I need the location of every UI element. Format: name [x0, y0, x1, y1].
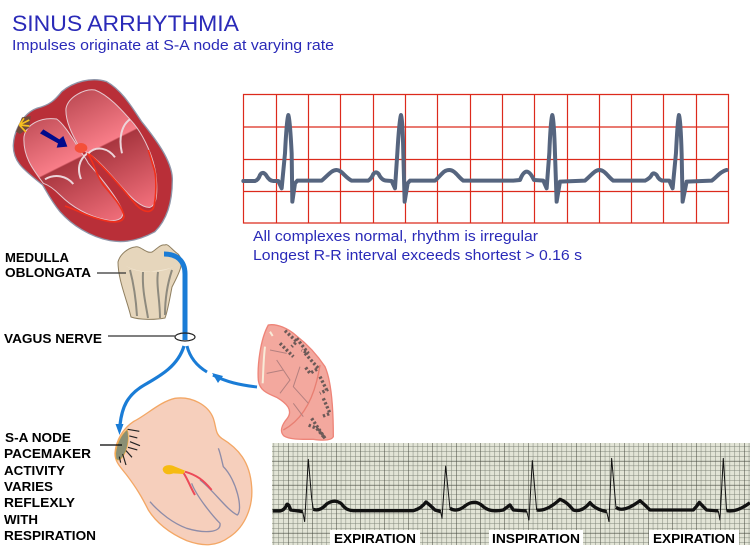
A-V node	[75, 143, 87, 153]
red bundle	[183, 472, 212, 495]
label: inspiration: INSPIRATION	[492, 531, 580, 546]
valves	[45, 119, 130, 184]
label: S-A node pacemaker: VARIES	[4, 479, 53, 494]
S-A node patch	[116, 429, 128, 460]
S-A node	[16, 116, 31, 134]
label: expiration: EXPIRATION	[334, 531, 416, 546]
chart: ECG strip with respiration	[272, 443, 750, 546]
text: ECG description: Longest R-R interval exceeds shortest > 0.16 s	[253, 248, 582, 264]
text: ECG description: All complexes normal, rhythm is irregular	[253, 229, 538, 245]
label: S-A node pacemaker: PACEMAKER	[4, 446, 92, 461]
gray-blue conduction fibers	[150, 448, 240, 532]
arrow: from lung	[212, 373, 223, 383]
label: S-A node pacemaker: REFLEXLY	[4, 495, 75, 510]
ECG trace	[243, 115, 727, 202]
chart: schematic ECG on red grid	[243, 94, 728, 223]
left chamber	[24, 119, 123, 221]
arrow: down to S-A node	[116, 424, 124, 435]
strip trace	[273, 458, 750, 522]
icon: yellow impulse rays	[19, 118, 29, 132]
text: ECG description	[253, 229, 582, 264]
arrow: blue impulse direction	[40, 129, 67, 148]
red grid	[244, 94, 728, 223]
illustration: heart cross-section	[13, 80, 172, 242]
label: expiration 2: EXPIRATION	[653, 531, 735, 546]
illustration: medulla oblongata	[118, 245, 181, 319]
label: S-A node pacemaker: ACTIVITY	[4, 463, 65, 478]
subtitle: Impulses originate at S-A node at varying rate	[12, 38, 334, 54]
label: medulla oblongata: OBLONGATA	[5, 265, 92, 280]
yellow A-V node	[163, 465, 185, 474]
label: medulla oblongata: MEDULLA	[5, 250, 70, 265]
right chamber	[66, 90, 157, 207]
lung speckles	[280, 331, 330, 438]
label: S-A node pacemaker	[4, 430, 122, 543]
vagus nerve ring	[175, 333, 195, 341]
vagus nerve pathway	[116, 254, 257, 435]
illustration: lung	[258, 325, 333, 440]
conduction bundle	[65, 150, 156, 222]
label: medulla oblongata	[5, 250, 126, 280]
label: S-A node pacemaker: WITH	[4, 512, 38, 527]
label: vagus nerve: VAGUS NERVE	[4, 331, 102, 346]
heart outer wall	[13, 80, 172, 242]
label: S-A node pacemaker: RESPIRATION	[4, 528, 96, 543]
title: SINUS ARRHYTHMIA	[12, 11, 239, 36]
illustration: lower heart	[115, 398, 252, 545]
grid paper	[272, 443, 750, 545]
pacemaker rays	[119, 429, 140, 465]
label: S-A node pacemaker: S-A NODE	[5, 430, 71, 445]
